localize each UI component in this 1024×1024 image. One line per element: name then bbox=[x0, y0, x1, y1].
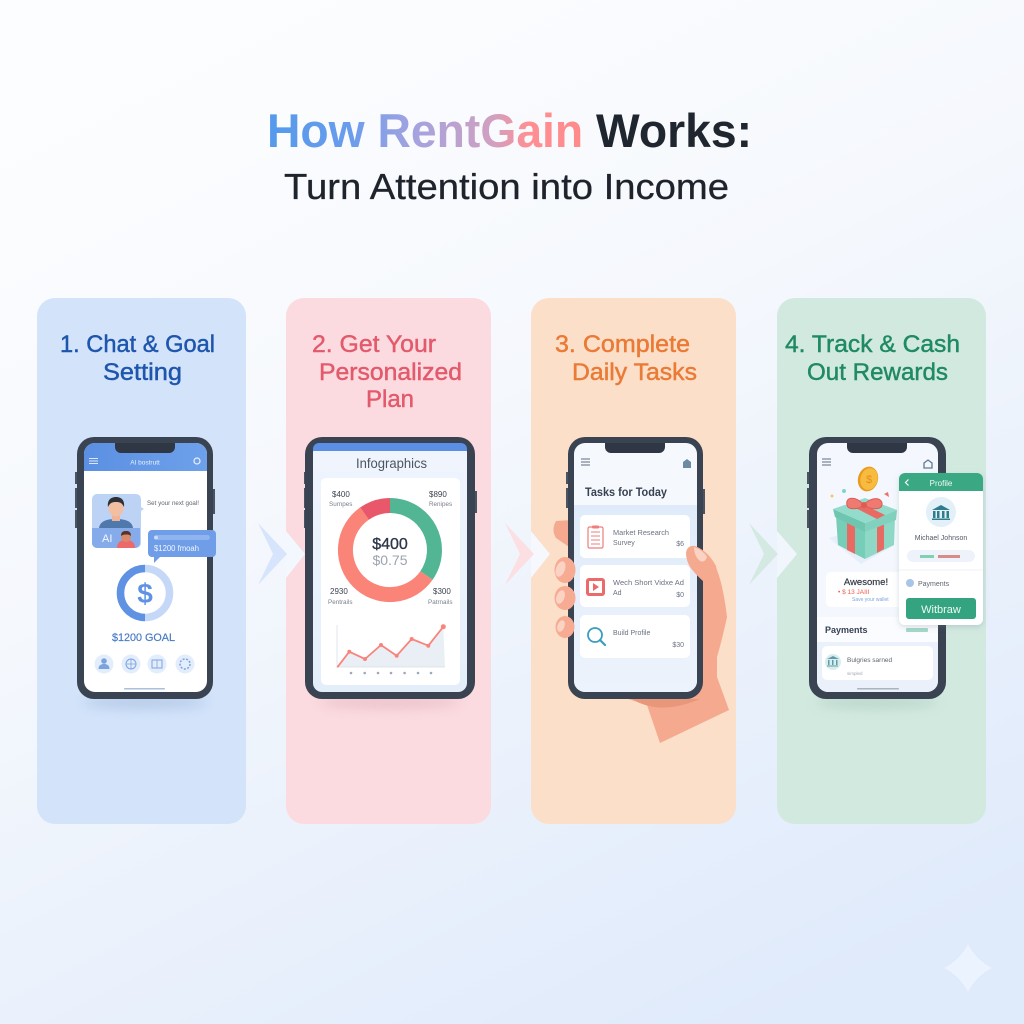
panel: step 2 personalized plan bbox=[286, 298, 491, 824]
donut labels: $400 bbox=[332, 490, 350, 499]
payments row bbox=[906, 579, 950, 588]
task card: video bbox=[580, 565, 690, 607]
payment row: Bulgries sarned bbox=[847, 657, 893, 664]
fingers over phone edge bbox=[554, 557, 576, 638]
donut labels: $890 bbox=[429, 490, 447, 499]
panel: step 1 chat and goal setting bbox=[37, 298, 246, 824]
goal ring bbox=[120, 568, 170, 618]
task card: profile bbox=[580, 615, 690, 658]
donut labels: 2930 bbox=[330, 587, 348, 596]
goal label: $1200 GOAL bbox=[112, 632, 175, 644]
gold coin bbox=[855, 464, 881, 494]
arrow: step 3 to 4 bbox=[749, 523, 797, 585]
heading: step 3: Daily Tasks bbox=[572, 359, 697, 386]
heading: step 1: Setting bbox=[103, 359, 182, 386]
gold coin: $ bbox=[866, 474, 872, 486]
bottom icon row bbox=[94, 654, 194, 674]
donut labels: Patrnails bbox=[428, 599, 452, 606]
arrow: step 2 to 3 bbox=[505, 523, 550, 585]
task card: profile: $30 bbox=[672, 642, 684, 649]
screen heading: Tasks for Today bbox=[585, 487, 668, 499]
heading: step 2: 2. Get Your bbox=[312, 331, 436, 358]
gift box illustration bbox=[829, 489, 897, 564]
sparkle icon bbox=[944, 944, 992, 992]
withdraw button: Witbraw bbox=[921, 604, 961, 616]
panel: step 4 track and cash out bbox=[777, 298, 986, 824]
profile card bbox=[899, 473, 983, 625]
profile header bbox=[899, 473, 983, 491]
task card: video: Wech Short Vidxe Ad bbox=[613, 580, 684, 587]
donut labels bbox=[328, 490, 452, 606]
profile header: Profile bbox=[930, 479, 953, 488]
phone: plan dashboard bbox=[304, 437, 477, 708]
heading: step 3: 3. Complete bbox=[555, 331, 690, 358]
task card: survey: Market Research bbox=[613, 530, 669, 537]
chat bubble bbox=[148, 530, 216, 563]
hand behind phone bbox=[554, 520, 729, 743]
donut chart: $0.75 bbox=[372, 552, 408, 568]
donut labels: Surnpes bbox=[329, 501, 352, 508]
task card: profile: Build Profile bbox=[613, 630, 650, 637]
task card: survey bbox=[580, 515, 690, 558]
thumb over phone bbox=[686, 546, 722, 600]
heading: step 4: Out Rewards bbox=[807, 359, 948, 386]
donut chart bbox=[345, 506, 434, 595]
phone: chat screen bbox=[75, 437, 216, 708]
chat prompt text: Set your next goal! bbox=[147, 500, 199, 507]
chat bubble: $1200 fmoah bbox=[154, 544, 199, 553]
panel: step 3 complete daily tasks bbox=[531, 298, 736, 824]
donut labels: $300 bbox=[433, 587, 451, 596]
heading: step 1: 1. Chat & Goal bbox=[60, 331, 215, 358]
awesome card: Save your wallet bbox=[852, 597, 889, 603]
line chart bbox=[337, 624, 446, 674]
bank icon bbox=[926, 497, 956, 527]
subtitle: Turn Attention into Income bbox=[284, 166, 729, 207]
heading: step 2: Personalized bbox=[319, 359, 462, 386]
heading: step 2: Plan bbox=[366, 386, 414, 413]
account pill bbox=[907, 550, 975, 562]
phone: rewards bbox=[807, 437, 946, 708]
awesome card bbox=[826, 572, 906, 607]
payments row: Payments bbox=[918, 581, 950, 588]
task card: survey: $6 bbox=[676, 541, 684, 548]
account name: Michael Johnson bbox=[915, 535, 967, 542]
awesome card: • $ 13 JAIII bbox=[838, 589, 870, 596]
donut labels: Pentrails bbox=[328, 599, 352, 606]
payment row: simpled bbox=[847, 671, 863, 676]
payment row bbox=[822, 646, 933, 680]
dashboard card bbox=[321, 478, 460, 685]
goal ring: $ bbox=[137, 578, 153, 609]
screen heading: Infographics bbox=[356, 456, 427, 471]
task card: video: $0 bbox=[676, 592, 684, 599]
title: How RentGain Works: bbox=[267, 104, 752, 157]
avatar tile: AI bbox=[102, 533, 112, 545]
arrow: step 1 to 2 bbox=[258, 523, 305, 585]
heading: step 4: 4. Track & Cash bbox=[785, 331, 960, 358]
withdraw button bbox=[906, 598, 976, 619]
avatar tile bbox=[92, 494, 144, 548]
task card: survey: Survey bbox=[613, 540, 635, 547]
task card: video: Ad bbox=[613, 590, 622, 597]
app header: AI bostrutt bbox=[130, 460, 160, 466]
awesome card: Awesome! bbox=[844, 577, 888, 588]
donut labels: Renipes bbox=[429, 501, 452, 508]
app header bbox=[84, 443, 207, 471]
donut chart: $400 bbox=[372, 536, 408, 553]
payments heading: Payments bbox=[825, 625, 868, 635]
phone: task list bbox=[566, 437, 705, 699]
